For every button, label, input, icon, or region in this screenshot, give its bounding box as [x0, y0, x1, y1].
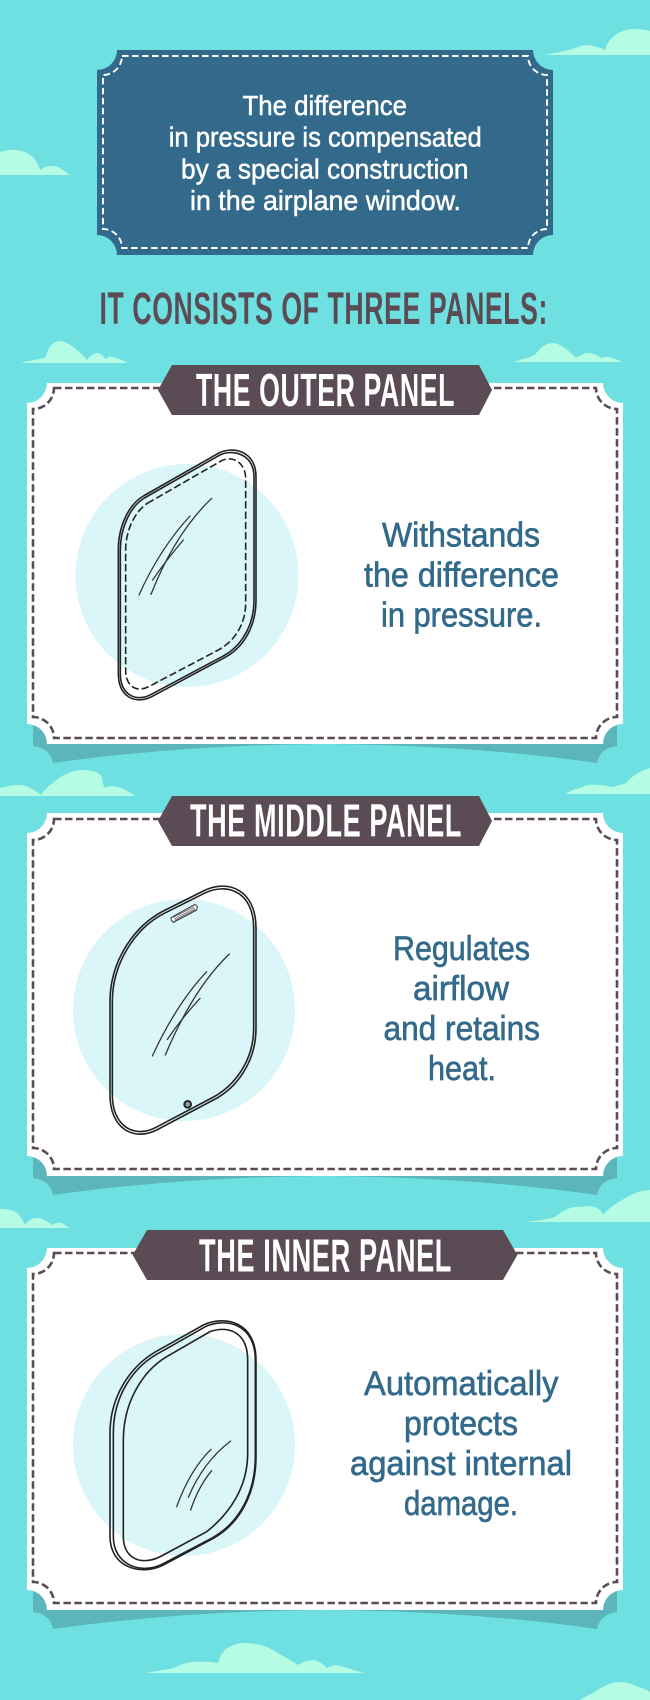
cloud: right between outer and middle	[565, 768, 650, 794]
intro text: in pressure is compensated	[169, 122, 482, 153]
description: inner: Automatically	[364, 1365, 559, 1403]
intro text: by a special construction	[181, 153, 468, 184]
banner: the outer panel: THE OUTER PANEL	[196, 364, 455, 416]
vent slot	[171, 904, 197, 922]
description: inner	[350, 1365, 572, 1523]
intro text: in the airplane window.	[190, 185, 461, 216]
intro text: The difference	[242, 90, 407, 121]
circle backdrop	[73, 1334, 295, 1556]
cloud: bottom centre	[147, 1643, 364, 1673]
banner: the middle panel: THE MIDDLE PANEL	[190, 795, 462, 847]
description: middle: airflow	[413, 970, 509, 1008]
description: inner: damage.	[404, 1485, 518, 1523]
intro box	[97, 50, 553, 255]
cloud: top right	[544, 29, 650, 55]
description: middle	[384, 930, 540, 1088]
icon: middle window	[110, 886, 256, 1134]
valve hole	[184, 1101, 191, 1108]
cloud: left between outer and middle	[0, 770, 135, 796]
cloud: upper left	[0, 150, 70, 175]
cloud: left above outer panel	[21, 341, 128, 363]
cloud: right above outer panel	[513, 343, 622, 362]
description: inner: against internal	[350, 1445, 572, 1483]
icon: inner window	[110, 1321, 256, 1570]
panel: middle	[27, 795, 623, 1195]
description: outer: the difference	[364, 557, 559, 595]
icon: outer window	[118, 450, 256, 700]
banner: the inner panel	[133, 1230, 517, 1282]
description: outer: Withstands	[382, 517, 540, 555]
circle backdrop	[76, 464, 298, 687]
intro text	[169, 90, 482, 216]
banner: the inner panel: THE INNER PANEL	[199, 1230, 452, 1282]
banner: the middle panel	[158, 795, 492, 847]
description: middle: and retains	[384, 1010, 540, 1048]
circle backdrop	[73, 899, 295, 1121]
panel: outer	[27, 364, 623, 763]
description: middle: Regulates	[393, 930, 530, 968]
description: middle: heat.	[428, 1050, 496, 1088]
panel: inner	[27, 1230, 623, 1629]
cloud: bottom right	[580, 1682, 650, 1700]
cloud: left between middle and inner	[0, 1209, 70, 1228]
description: inner: protects	[404, 1405, 518, 1443]
banner: the outer panel	[158, 364, 492, 416]
description: outer	[364, 517, 559, 635]
cloud: right between middle and inner	[524, 1190, 650, 1222]
description: outer: in pressure.	[381, 597, 542, 635]
